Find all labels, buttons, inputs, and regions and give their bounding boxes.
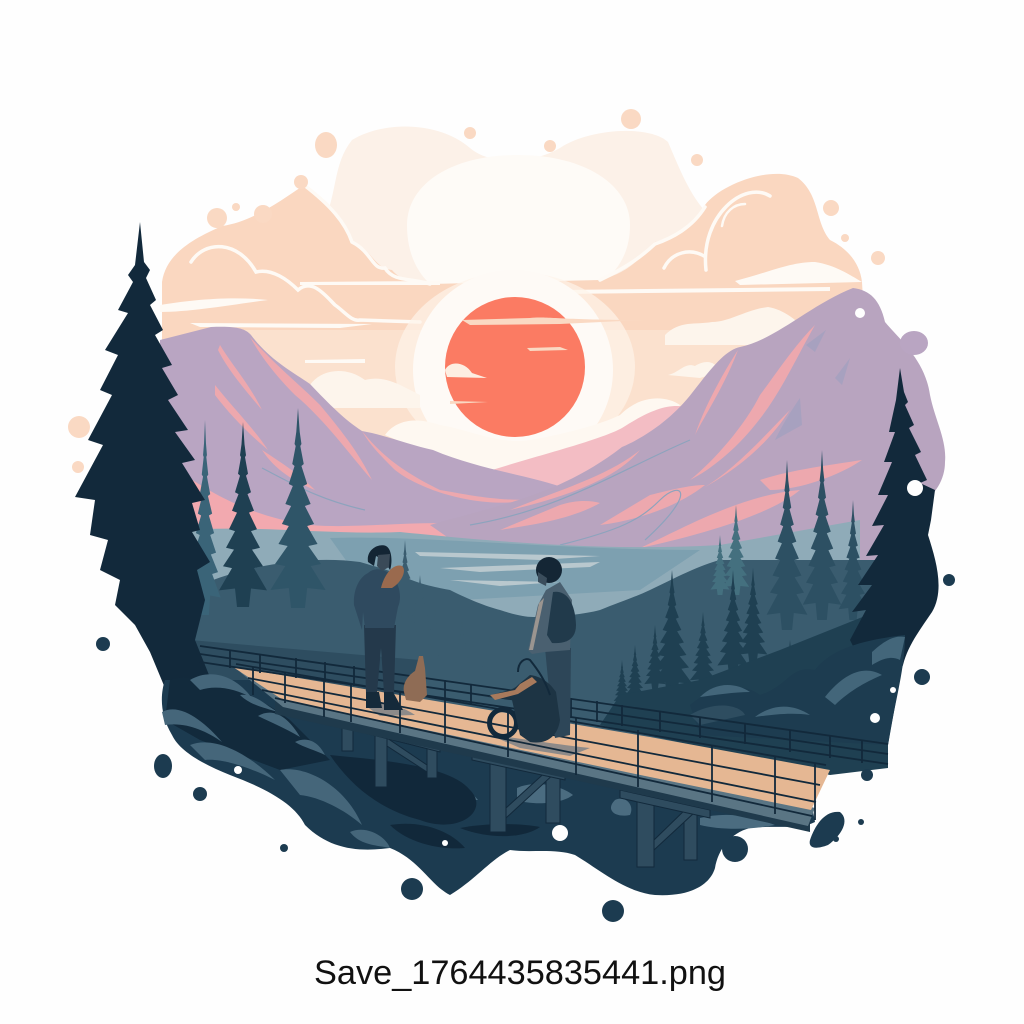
splash droplets peach (68, 109, 885, 473)
deck shadows (366, 704, 590, 756)
caption: Save_1764435835441.png (314, 954, 726, 992)
held animal (381, 566, 404, 588)
river (440, 784, 775, 829)
bridge supports (342, 715, 710, 867)
horizontal cloud streaks (160, 262, 862, 363)
far pink mountain (492, 406, 760, 520)
lavender blob (900, 331, 928, 355)
legs (545, 648, 571, 738)
small right cloud (668, 362, 720, 378)
back railing (200, 646, 888, 764)
lower sky glow (230, 330, 790, 460)
right dark tree and edge blob (850, 368, 939, 700)
man figure (528, 557, 576, 738)
cloud white edges (191, 185, 770, 322)
clouds over sun (445, 317, 645, 404)
left mountain (160, 327, 570, 560)
face (377, 554, 390, 571)
sun (445, 297, 585, 437)
splash droplets white (112, 308, 923, 846)
dark river shadows (330, 755, 540, 848)
right mountain (430, 288, 945, 570)
torso (354, 569, 400, 630)
distant forest (189, 408, 890, 785)
pale sun disc (407, 155, 630, 284)
left big tree (75, 222, 215, 700)
valley water (180, 520, 860, 660)
motorbike (488, 659, 560, 743)
shoes (366, 692, 403, 710)
pale back clouds (322, 127, 706, 300)
right cloud (665, 307, 805, 345)
left rocks (162, 674, 390, 848)
sun ring (413, 270, 613, 470)
bottom sun clouds (385, 398, 680, 480)
near right forest (600, 568, 905, 775)
arm highlight (529, 598, 544, 650)
woman figure (354, 545, 404, 710)
front railing (236, 664, 826, 820)
bridge deck side (275, 700, 810, 832)
sky scene (160, 127, 870, 480)
small dog (404, 656, 427, 702)
sun halo (395, 272, 635, 462)
left lower cloud (310, 371, 420, 408)
bridge planks (233, 667, 830, 810)
hair (368, 545, 391, 570)
bridge edge (240, 672, 815, 826)
peach sky (162, 174, 870, 420)
head (536, 557, 562, 583)
bottom dark blob (162, 680, 815, 895)
torso (528, 582, 572, 654)
legs (364, 625, 396, 693)
bridge (200, 646, 888, 867)
backpack (547, 592, 576, 643)
splash droplets dark (96, 574, 955, 922)
right rocks (690, 635, 905, 745)
